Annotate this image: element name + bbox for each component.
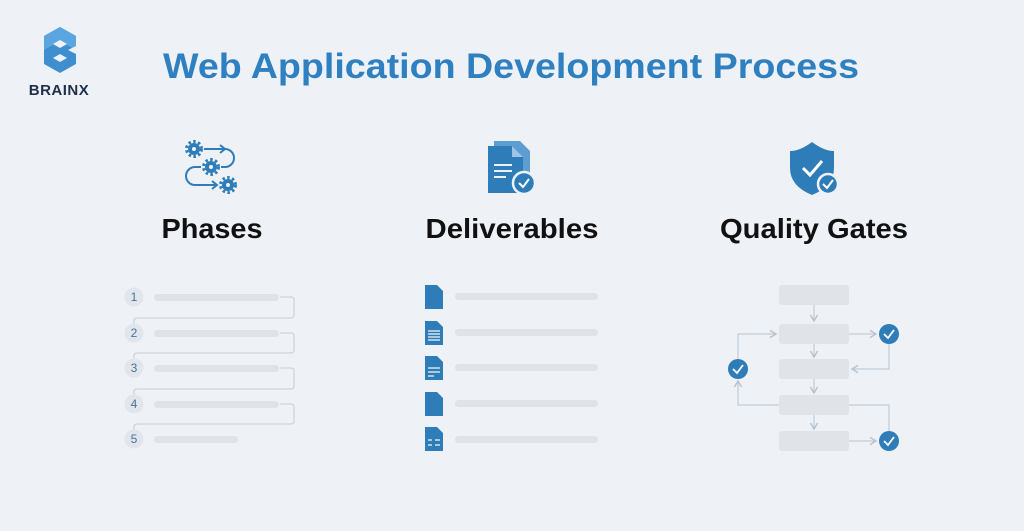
heading: phases: Phases — [162, 213, 262, 244]
panel: phases — [124, 142, 294, 448]
numbered list: 2 — [131, 326, 138, 340]
numbered list: 3 — [131, 361, 138, 375]
numbered list: 1 — [131, 290, 138, 304]
numbered list: 5 — [131, 432, 138, 446]
title: Web Application Development Process — [163, 47, 859, 86]
icon: gears flow — [186, 142, 236, 192]
icon: document with check — [488, 141, 535, 194]
icon: shield with check — [790, 142, 838, 195]
panel: deliverables — [425, 141, 598, 451]
panel: quality gates — [720, 142, 908, 451]
numbered list — [124, 288, 294, 448]
flowchart — [728, 285, 899, 451]
heading: quality gates: Quality Gates — [720, 213, 908, 244]
logo text: BRAINX — [29, 82, 89, 99]
icon: brainx hexagon — [44, 27, 76, 73]
numbered list: 4 — [131, 397, 138, 411]
document list — [425, 285, 598, 451]
logo — [29, 27, 89, 99]
heading: deliverables: Deliverables — [426, 213, 598, 244]
